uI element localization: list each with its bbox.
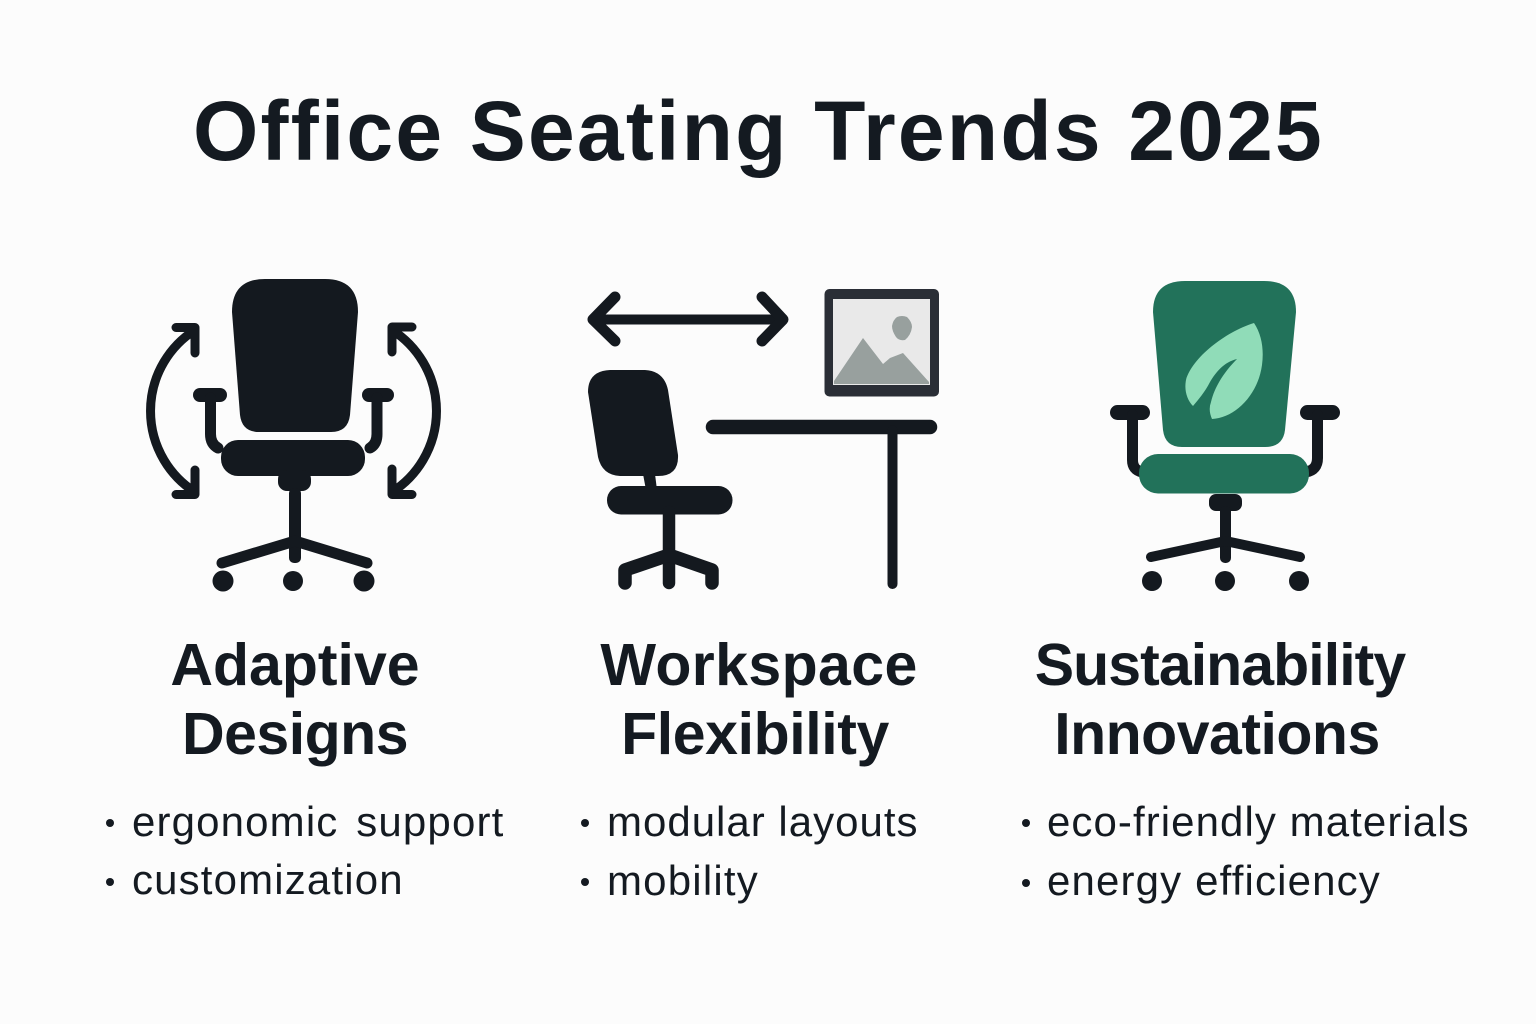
list: sustainability innovations bullets: energy efficiency: [1047, 857, 1381, 904]
list: sustainability innovations bullets: eco-friendly materials: [1047, 798, 1470, 845]
list: adaptive designs bullets: customization: [132, 856, 404, 903]
list: workspace flexibility bullets: mobility: [607, 857, 759, 904]
icon: adaptive chair with arrows: [151, 279, 436, 592]
double-headed arrow: [593, 297, 783, 341]
armrests: [1110, 405, 1340, 472]
heading: Workspace Flexibility: [600, 632, 918, 767]
list: adaptive designs bullets: ergonomic support: [132, 798, 504, 845]
green chair back: [1153, 281, 1296, 447]
heading: Adaptive Designs: Adaptive: [170, 632, 420, 698]
heading: Sustainability Innovations: [1035, 632, 1406, 767]
heading: Sustainability Innovations: Sustainability: [1035, 632, 1405, 698]
green chair seat: [1139, 454, 1309, 494]
arrow: left rotation: [151, 328, 195, 494]
chair seat and base: [212, 440, 374, 592]
heading: Sustainability Innovations: Innovations: [1054, 701, 1380, 767]
icon: workspace desk, chair, picture and arrow: [588, 289, 939, 584]
icon: leaf: [1185, 323, 1263, 419]
chair armrests: [193, 388, 394, 448]
heading: Adaptive Designs: Designs: [182, 701, 408, 767]
small office chair: [588, 370, 732, 583]
arrow: right rotation: [392, 327, 436, 494]
list: adaptive designs bullets: [106, 798, 504, 903]
heading: Adaptive Designs: [170, 632, 420, 767]
list: sustainability innovations bullets: [1022, 798, 1470, 904]
title: Office Seating Trends 2025: [193, 84, 1324, 178]
list: workspace flexibility bullets: modular layouts: [607, 798, 918, 845]
chair back: [232, 279, 358, 432]
icon: sustainable green chair with leaf: [1110, 281, 1340, 591]
chair base: [1142, 494, 1309, 591]
picture frame: [824, 289, 939, 396]
heading: Workspace Flexibility: Flexibility: [621, 701, 889, 767]
list: workspace flexibility bullets: [581, 798, 918, 904]
desk: [713, 427, 930, 584]
heading: Workspace Flexibility: Workspace: [600, 632, 918, 698]
